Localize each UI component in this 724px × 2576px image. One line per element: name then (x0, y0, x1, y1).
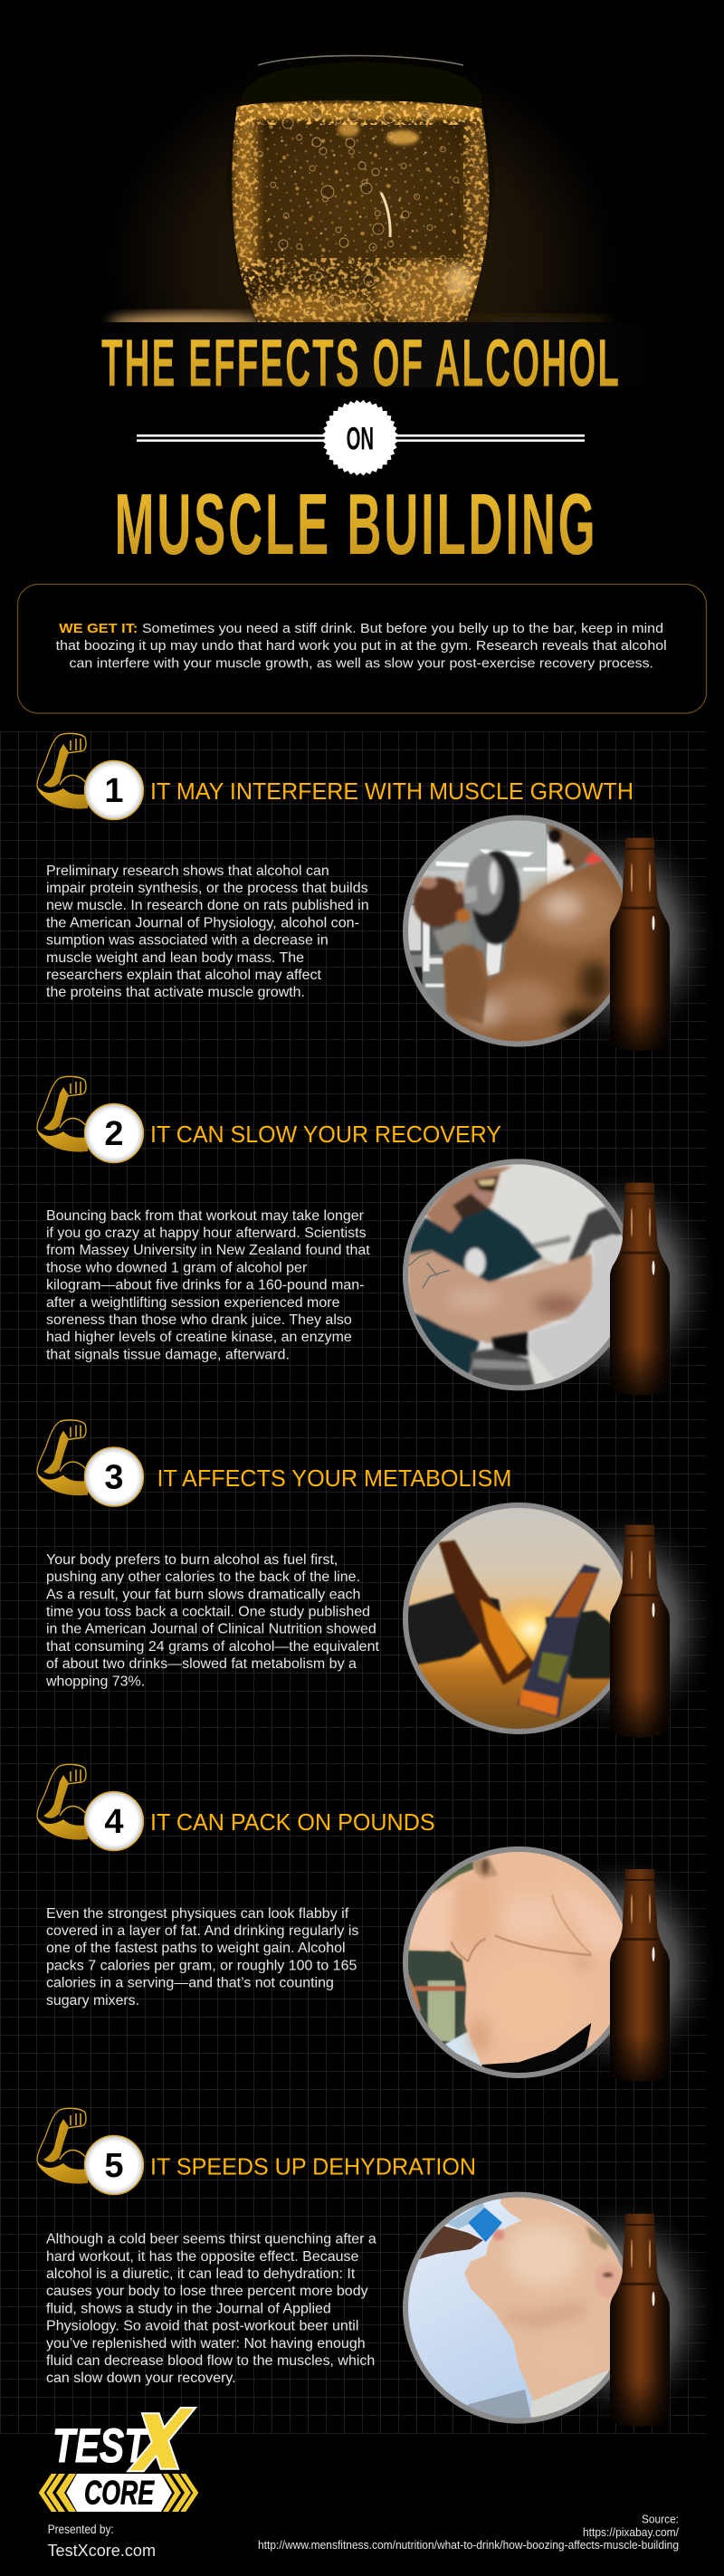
text block 2: Bouncing back from that workout may take longer (46, 1208, 364, 1224)
heading 3: IT AFFECTS YOUR METABOLISM (157, 1466, 511, 1492)
logo wordmark TEST: TEST (52, 2419, 150, 2473)
source credits (258, 2513, 679, 2552)
text block 3: pushing any other calories to the back of the line. (46, 1569, 360, 1585)
text block 2: those who downed 1 gram of alcohol per (46, 1260, 307, 1275)
number badge 1: 1 (104, 772, 124, 810)
text block 2: kilogram—about five drinks for a 160-pound man- (46, 1278, 364, 1293)
heading 4: IT CAN PACK ON POUNDS (150, 1810, 435, 1836)
text block 5: causes your body to lose three percent more body (46, 2284, 368, 2299)
number badge 3 (85, 1447, 143, 1506)
text block 3: whopping 73%. (45, 1674, 145, 1689)
icon: flexed arm 4 (37, 1764, 88, 1840)
text block 5: fluid, shows a study in the Journal of Applied (46, 2301, 331, 2316)
icon: beer bottle 2 (610, 1183, 670, 1395)
text block 3: in the American Journal of Clinical Nutrition showed (46, 1622, 376, 1637)
panel: intro: that boozing it up may undo that hard work you put in at the gym. Research reveals that alcohol (56, 638, 667, 654)
divider rules with burst badge (137, 400, 585, 476)
presenter credit: TestXcore.com (47, 2542, 156, 2560)
text block 3: time you toss back a cocktail. One study published (46, 1604, 370, 1620)
text block 2: from Massey University in New Zealand found that (46, 1243, 370, 1258)
icon: flexed arm 5 (37, 2108, 88, 2184)
number badge 3: 3 (104, 1459, 124, 1497)
logo CORE banner (39, 2474, 198, 2512)
panel: intro: WE GET IT: (59, 621, 138, 636)
icon: beer bottle 5 (610, 2214, 670, 2426)
text block 2: after a weightlifting session experienced more (46, 1295, 340, 1311)
text block 3: of about two drinks—slowed fat metabolism by a (46, 1656, 357, 1672)
panel: intro (18, 585, 706, 713)
logo X (129, 2409, 194, 2470)
text block 4: covered in a layer of fat. And drinking regularly is (46, 1923, 358, 1939)
text block 5: fluid can decrease blood flow to the muscles, which (46, 2353, 375, 2369)
text block 2: soreness than those who drank juice. They also (46, 1312, 352, 1328)
section 1 (37, 733, 719, 1054)
number badge 1 (85, 760, 143, 820)
burst badge: ON: ON (347, 422, 374, 456)
heading 5: IT SPEEDS UP DEHYDRATION (150, 2154, 476, 2180)
logo: TestX Core (39, 2409, 198, 2512)
text block 5: alcohol is a diuretic, it can lead to dehydration: It (46, 2266, 356, 2282)
icon: flexed arm 1 (37, 733, 88, 809)
text block 5 (46, 2232, 376, 2386)
panel: intro: Sometimes you need a stiff drink. But before you belly up to the bar, keep in mind (142, 621, 663, 636)
number badge 4: 4 (104, 1803, 124, 1841)
number badge 2 (85, 1104, 143, 1162)
text block 2: that signals tissue damage, afterward. (46, 1347, 290, 1362)
hero photo: champagne glass (103, 54, 610, 322)
bottle glow 3 (529, 1505, 719, 1741)
text block 2 (46, 1208, 370, 1362)
photo: overweight torso (403, 1846, 623, 2078)
text block 1: the American Journal of Physiology, alcohol con- (46, 915, 359, 930)
section 3 (37, 1420, 719, 1741)
text block 3 (45, 1552, 380, 1689)
background grid (0, 731, 706, 2434)
text block 2: if you go crazy at happy hour afterward. Scientists (46, 1226, 367, 1241)
section 4 (37, 1764, 719, 2086)
bottle glow 2 (529, 1163, 719, 1398)
icon: beer bottle 1 (610, 838, 670, 1050)
panel: intro: can interfere with your muscle growth, as well as slow your post-exercise recovery process. (69, 655, 653, 672)
source credits: https://pixabay.com/ (583, 2525, 679, 2539)
text block 4: calories in a serving—and that’s not counting (46, 1976, 334, 1991)
heading 1: IT MAY INTERFERE WITH MUSCLE GROWTH (150, 779, 634, 805)
text block 3: As a result, your fat burn slows dramatically each (46, 1587, 360, 1602)
text block 4: packs 7 calories per gram, or roughly 100 to 165 (46, 1958, 357, 1973)
bottle glow 5 (529, 2193, 719, 2428)
text block 1: impair protein synthesis, or the process that builds (46, 881, 368, 896)
text block 5: you’ve replenished with water: Not having enough (46, 2336, 366, 2352)
source credits: http://www.mensfitness.com/nutrition/what-to-drink/how-boozing-affects-muscle-building (258, 2538, 679, 2552)
number badge 2: 2 (104, 1115, 124, 1153)
text block 1: new muscle. In research done on rats published in (46, 898, 369, 913)
photo: man drinking water (403, 2192, 623, 2424)
logo CORE banner: CORE (84, 2475, 155, 2512)
text block 3: Your body prefers to burn alcohol as fuel first, (46, 1552, 338, 1568)
number badge 5 (85, 2136, 143, 2194)
text block 5: hard workout, it has the opposite effect. Because (46, 2249, 359, 2265)
bottle glow 4 (529, 1849, 719, 2085)
text block 4: sugary mixers. (46, 1993, 139, 2008)
heading 2: IT CAN SLOW YOUR RECOVERY (150, 1122, 501, 1148)
presenter credit (47, 2523, 156, 2560)
icon: flexed arm 2 (37, 1076, 88, 1152)
text block 1: sumption was associated with a decrease in (46, 933, 329, 949)
text block 1: Preliminary research shows that alcohol can (46, 863, 329, 879)
icon: beer bottle 3 (610, 1525, 670, 1737)
bottle glow 1 (529, 819, 719, 1054)
icon: flexed arm 3 (37, 1420, 88, 1495)
section 5 (37, 2108, 719, 2430)
text block 2: had higher levels of creatine kinase, an enzyme (46, 1330, 352, 1345)
burst badge: ON (322, 400, 398, 476)
text block 4: Even the strongest physiques can look flabby if (46, 1906, 349, 1922)
text block 4: one of the fastest paths to weight gain. Alcohol (46, 1941, 346, 1956)
text block 1 (46, 863, 369, 1000)
source credits: Source: (642, 2513, 679, 2526)
text block 5: can slow down your recovery. (46, 2371, 236, 2386)
photo: bottles at sunset (397, 1499, 632, 1735)
text block 5: Although a cold beer seems thirst quenching after a (46, 2232, 376, 2247)
photo: lifter with dumbbell (398, 810, 643, 1054)
text block 3: that consuming 24 grams of alcohol—the equivalent (46, 1639, 380, 1655)
icon: beer bottle 4 (610, 1869, 670, 2082)
number badge 4 (85, 1792, 143, 1850)
text block 4 (46, 1906, 358, 2008)
text block 5: Physiology. So avoid that post-workout beer until (46, 2319, 358, 2334)
text block 1: the proteins that activate muscle growth. (46, 985, 305, 1000)
photo: man with towel (403, 1159, 623, 1390)
text block 1: researchers explain that alcohol may affect (46, 968, 322, 983)
presenter credit: Presented by: (48, 2523, 114, 2536)
section 2 (37, 1076, 719, 1398)
number badge 5: 5 (104, 2147, 124, 2185)
dark title band (107, 322, 661, 387)
text block 1: muscle weight and lean body mass. The (46, 950, 304, 966)
